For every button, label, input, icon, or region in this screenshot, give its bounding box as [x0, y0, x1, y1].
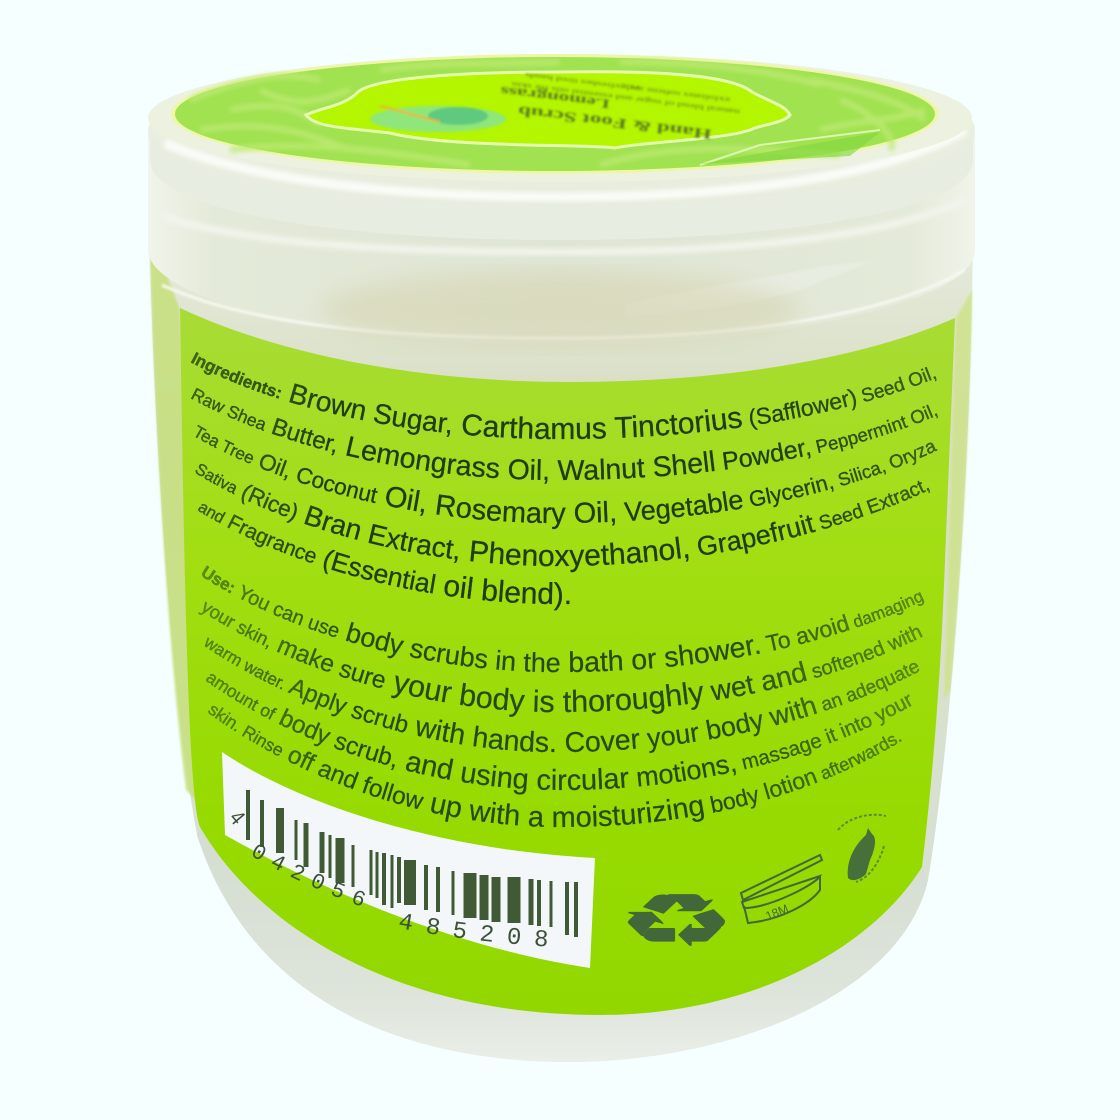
ingredients text block	[190, 352, 938, 610]
scalloped centre panel	[306, 72, 790, 148]
upside-down sticker text: exfoliates softens and refreshes tired hands	[525, 71, 730, 103]
upside-down sticker text: Hand & Foot Scrub	[517, 103, 712, 142]
sticker ground with swirls	[171, 54, 939, 174]
barcode digits	[222, 807, 547, 946]
upside-down sticker text: PLE	[620, 82, 640, 91]
back label	[180, 308, 955, 1015]
ingredients line 4: Sativa (Rice) Bran Extract, Phenoxyethanol, Grapefruit Seed Extract,	[196, 464, 930, 572]
usage line 2: your skin, make sure your body is thoroughly wet and softened with	[198, 602, 923, 717]
barcode bars	[248, 790, 576, 937]
upside-down sticker text: Lemongrass	[499, 84, 610, 112]
lemon image	[370, 106, 506, 132]
ingredients line 2: Raw Shea Butter, Lemongrass Oil, Walnut Shell Powder, Peppermint Oil,	[191, 388, 938, 484]
ingredients line 3: Tea Tree Oil, Coconut Oil, Rosemary Oil, Vegetable Glycerin, Silica, Oryza	[196, 424, 938, 530]
usage line 1: Use: You can use body scrubs in the bath or shower. To avoid damaging	[202, 566, 924, 672]
icon: recycling symbol: ♻	[618, 879, 735, 962]
ingredients line 1: Ingredients: Brown Sugar, Carthamus Tinctorius (Safflower) Seed Oil,	[190, 352, 936, 440]
top sticker	[171, 54, 939, 174]
icon: cruelty-free rabbit	[838, 815, 886, 882]
usage line 3: warm water. Apply scrub with hands. Cover your body with an adequate	[204, 637, 920, 754]
icon: 18 month period-after-opening jar: 18M	[763, 901, 790, 923]
lid	[148, 125, 975, 348]
lid side bands	[148, 130, 975, 345]
usage line 5: skin. Rinse off and follow up with a moisturizing body lotion afterwards.	[208, 706, 902, 828]
jar body	[148, 54, 975, 1062]
jar lower base shading	[197, 827, 928, 1062]
upside-down sticker text	[499, 71, 740, 142]
lid top rim	[148, 54, 972, 182]
ingredients line 5: and Fragrance (Essential oil blend).	[198, 504, 570, 610]
barcode digits: 485208	[400, 914, 547, 946]
barcode sticker	[222, 752, 595, 968]
barcode digits: 042056	[253, 844, 365, 906]
icon: 18 month period-after-opening jar	[741, 855, 822, 923]
pale side label strips	[150, 250, 972, 800]
barcode digits: 4	[222, 807, 249, 831]
usage text block	[198, 566, 924, 828]
upside-down sticker text: natural blend of sugar and essential oils for skin	[511, 80, 740, 115]
usage line 4: amount of body scrub, and using circular motions, massage it into your	[206, 674, 912, 795]
